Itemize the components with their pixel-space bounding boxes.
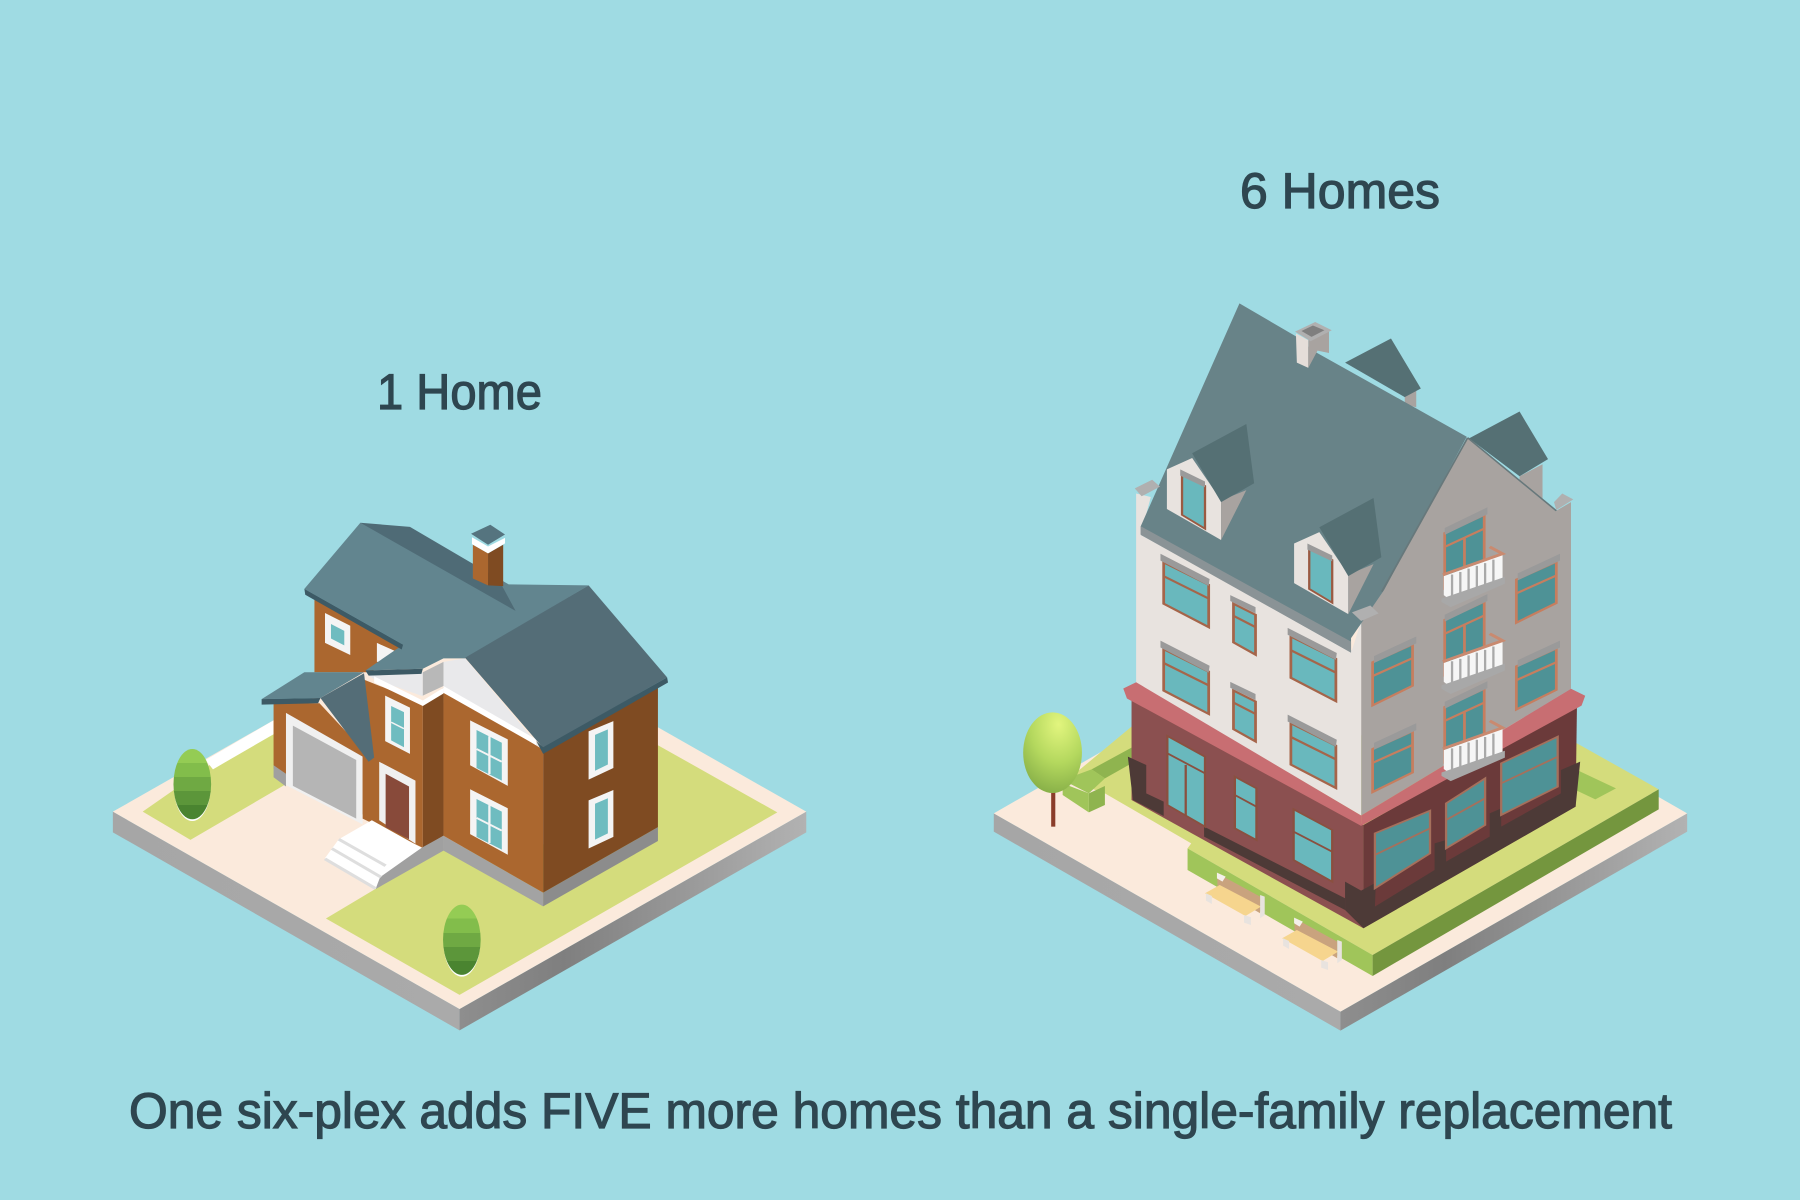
tree <box>1023 712 1082 827</box>
ground floor: dark base <box>1128 757 1580 928</box>
porch roof <box>262 672 374 762</box>
gable trim <box>369 658 541 748</box>
bay front wall <box>363 679 423 848</box>
upper right wall <box>1361 438 1571 816</box>
roof dormer: right <box>1294 498 1381 614</box>
upper part of six-plex <box>1123 303 1585 826</box>
lawn: left <box>143 720 286 840</box>
back wing windows <box>325 613 396 662</box>
balconies <box>1441 507 1505 781</box>
right facade windows <box>1373 554 1560 792</box>
caption: One six-plex adds FIVE more homes than a single-family replacement <box>129 1083 1672 1139</box>
garage door <box>286 713 363 824</box>
ground floor: left windows <box>1167 736 1332 882</box>
front windows <box>385 696 508 855</box>
heading: 1 Home: 1 Home <box>377 364 542 420</box>
left wall <box>443 688 543 893</box>
ground floor: right wall <box>1363 705 1577 928</box>
back wing wall <box>314 598 405 672</box>
foundation <box>443 827 658 906</box>
roof dormer: left <box>1167 424 1254 540</box>
illustration: six-plex building <box>994 303 1687 1031</box>
side windows <box>589 721 613 849</box>
heading: 6 Homes: 6 Homes <box>1240 163 1440 219</box>
illustration: single-family house <box>113 523 806 1030</box>
pink belt course <box>1123 682 1585 826</box>
lot base slab <box>994 615 1687 1031</box>
corner caps <box>1135 480 1573 621</box>
bay side wall <box>423 688 443 848</box>
chimney <box>471 525 505 586</box>
lawn <box>1067 727 1659 955</box>
back garden patch <box>1576 770 1616 799</box>
chimney <box>1295 322 1332 368</box>
garage wall <box>274 703 374 820</box>
ground floor: right windows <box>1375 737 1558 888</box>
back dormers <box>1345 339 1548 500</box>
lot base slab <box>113 614 806 1030</box>
roof <box>304 523 668 754</box>
lawn: right <box>326 745 777 995</box>
left facade windows <box>1160 554 1337 788</box>
main roof <box>1141 303 1556 653</box>
front door <box>379 762 415 844</box>
bench: right <box>1282 918 1342 970</box>
lower part of six-plex <box>994 615 1687 1031</box>
shrub: front <box>443 905 481 977</box>
front steps <box>325 820 443 889</box>
shrub: left <box>173 749 211 821</box>
raised lawn faces <box>1188 789 1659 976</box>
hedge <box>1063 748 1132 812</box>
right wall <box>543 686 658 893</box>
bench: left <box>1205 873 1265 925</box>
upper left wall <box>1136 494 1361 816</box>
ground floor: left wall <box>1132 697 1363 928</box>
garage foundation <box>274 765 286 787</box>
